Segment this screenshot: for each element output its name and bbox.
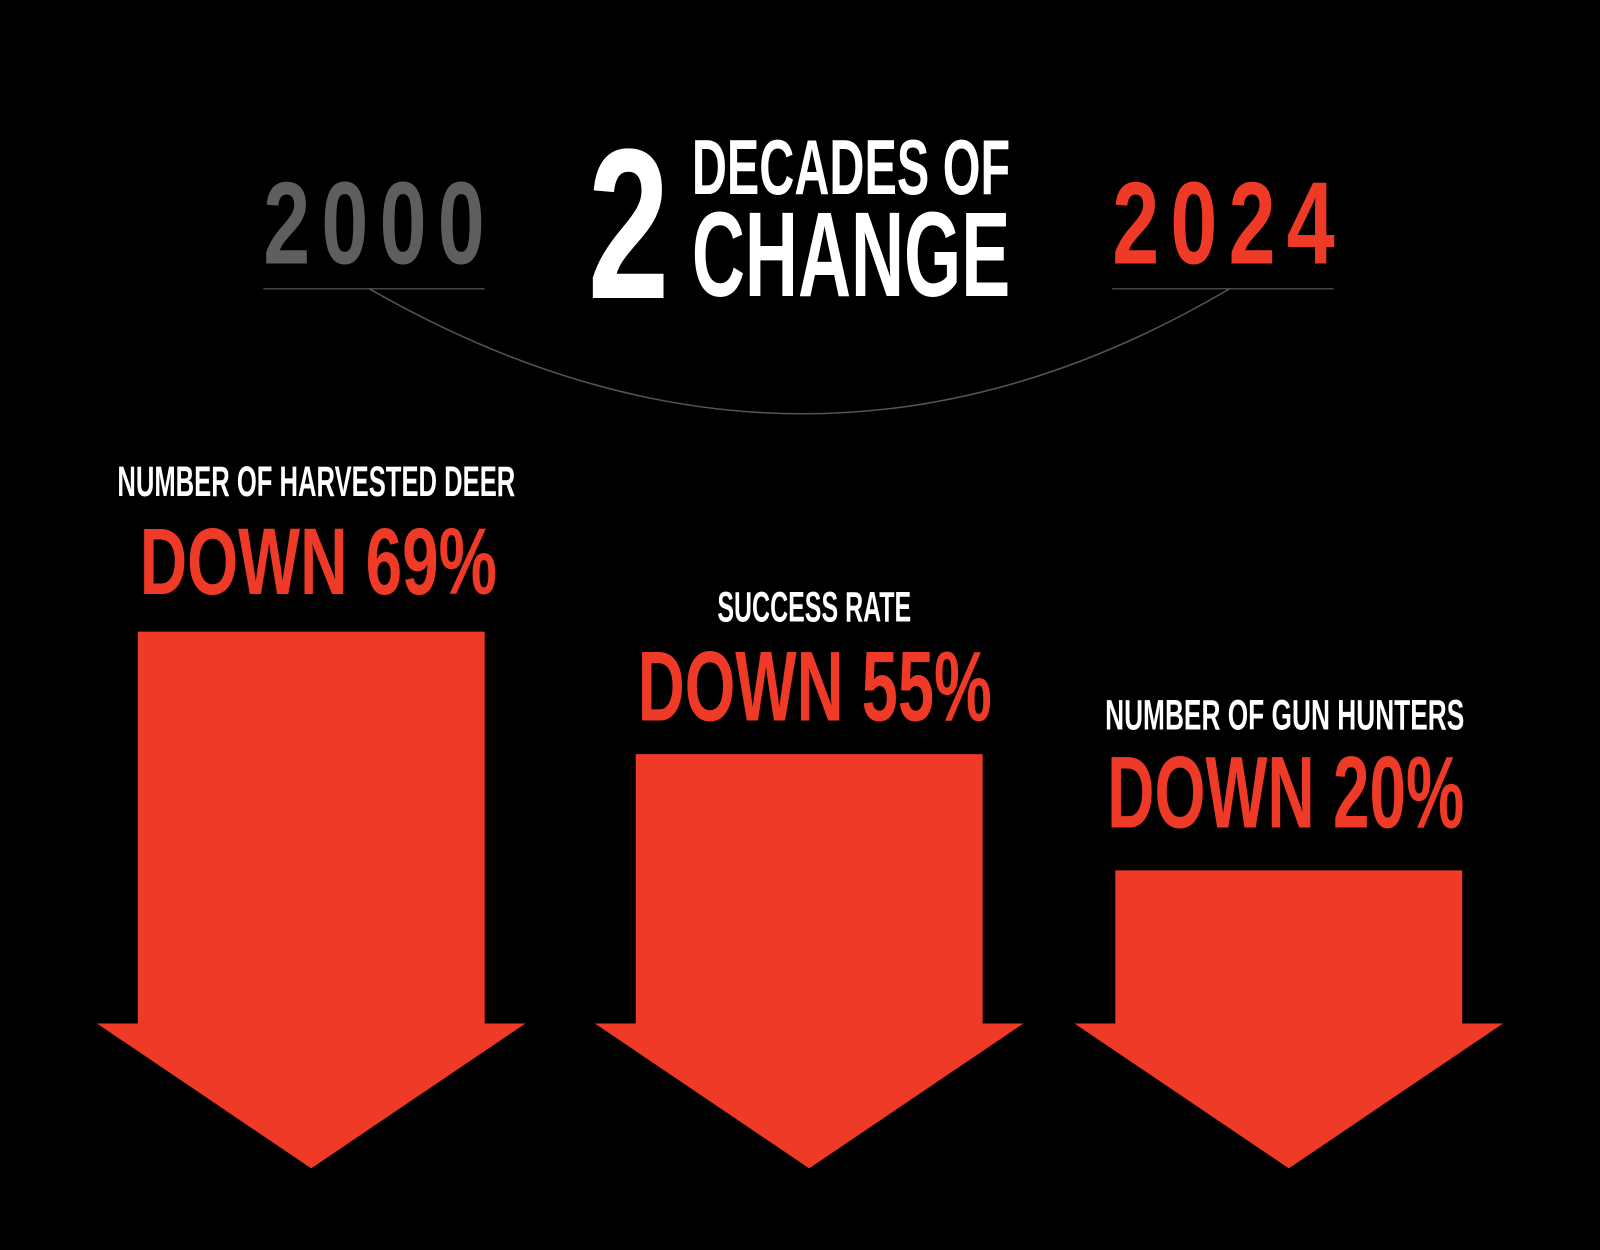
panel: success rate [595, 583, 1023, 1168]
year 2000: 0 [321, 157, 368, 288]
panel: harvested deer [97, 458, 526, 1168]
year 2000: 0 [380, 157, 427, 288]
arrow [1074, 870, 1503, 1168]
year 2024: 2 [1229, 157, 1276, 288]
year 2000: 0 [438, 157, 485, 288]
arrow [97, 632, 526, 1168]
stat: DOWN 55% [638, 630, 992, 741]
connector arc [369, 289, 1230, 414]
title block [263, 105, 1335, 414]
big numeral 2: 2 [588, 105, 669, 344]
label: NUMBER OF HARVESTED DEER [117, 458, 515, 506]
year 2000 [263, 157, 485, 288]
label: SUCCESS RATE [717, 583, 911, 631]
heading: decades of: DECADES OF [692, 125, 1010, 211]
year 2024 [1112, 157, 1335, 288]
year 2024: 4 [1287, 157, 1335, 288]
year 2024: 2 [1112, 157, 1159, 288]
heading: change: CHANGE [692, 187, 1010, 322]
arrow [595, 754, 1023, 1168]
panel: gun hunters [1074, 692, 1503, 1168]
stat: DOWN 69% [140, 509, 497, 615]
year 2024: 0 [1170, 157, 1217, 288]
year 2000: 2 [263, 157, 310, 288]
